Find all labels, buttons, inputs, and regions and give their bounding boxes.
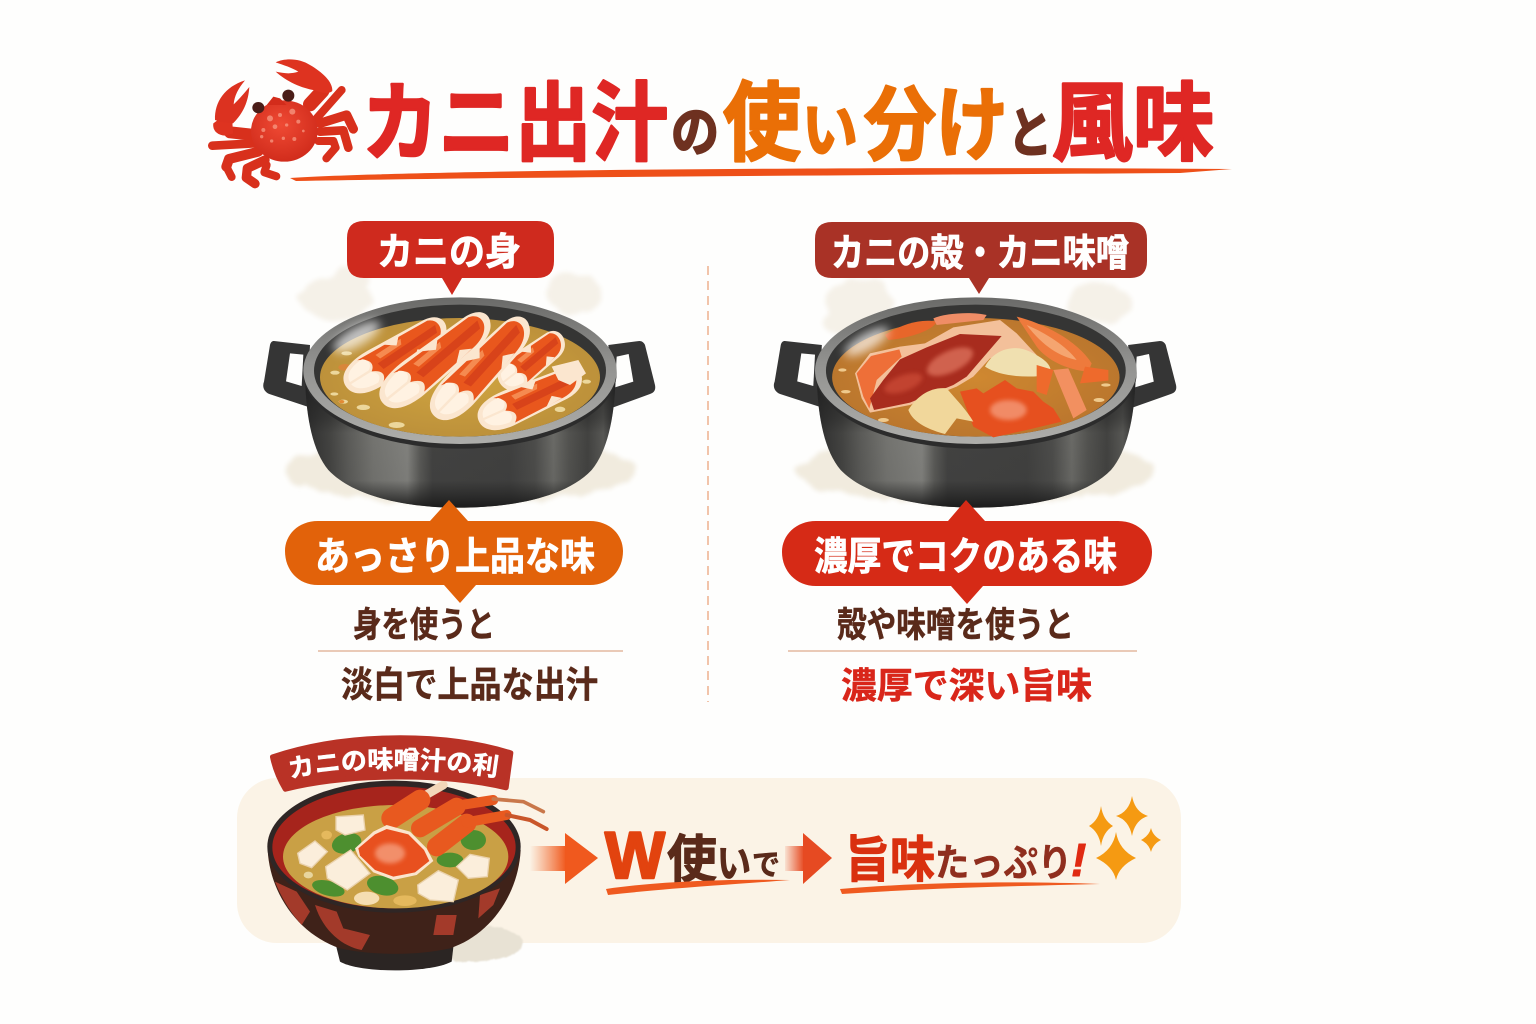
caption: 淡白で上品な出汁: 淡白で上品な出汁: [341, 664, 598, 705]
caption: 殻や味噌を使うと: 殻や味噌を使うと: [837, 606, 1074, 645]
steam: [297, 266, 603, 318]
pot: [263, 297, 655, 508]
bowl shadow: [417, 925, 523, 962]
arrow to umami: [785, 833, 832, 884]
text: W使いで: で: [752, 849, 780, 882]
steam: [822, 278, 1132, 336]
arrow to W use: [530, 833, 598, 884]
caption rule: [318, 650, 623, 652]
tofu cubes: [298, 815, 489, 902]
bowl illustration: [267, 735, 549, 970]
title block: [212, 59, 1232, 184]
taste bubble: light flavour: あっさり上品な味: [315, 536, 595, 579]
text: 旨味たっぷり!: [845, 832, 1086, 888]
crab legs: [336, 304, 589, 437]
taste bubble: light flavour: [285, 500, 623, 603]
bowl foot: [335, 942, 454, 970]
text: 旨味たっぷり!: たっぷり: [935, 843, 1072, 885]
panel: crab shell and miso pot: [774, 222, 1176, 706]
title text: 分け: 分け: [864, 81, 1008, 170]
broth: [320, 318, 600, 437]
divider: [707, 266, 709, 702]
taste bubble: rich flavour: 濃厚でコクのある味: [814, 536, 1117, 579]
icon: red crab: [212, 59, 353, 184]
banner: カニの味噌汁の利: カニの味噌汁の利: [290, 747, 499, 778]
text: 旨味たっぷり!: 旨味: [845, 832, 935, 888]
crab shell pieces: [841, 313, 1108, 437]
caption: 身を使うと: 身を使うと: [353, 606, 495, 645]
pot shadow: [283, 436, 635, 504]
text: W使いで: W: [605, 818, 666, 892]
steam highlight on rim: [329, 315, 384, 358]
vegetables: [310, 830, 486, 900]
title underline brush: [290, 168, 1232, 181]
crab on bowl: [355, 785, 547, 880]
bowl rim: [267, 781, 521, 913]
broth: [832, 318, 1120, 437]
underline: W使いで: [606, 880, 790, 895]
shell and miso label bubble: カニの殻・カニ味噌: [831, 233, 1129, 275]
shell and miso label bubble: [815, 222, 1147, 294]
title text: カニ出汁: カニ出汁: [362, 76, 668, 172]
caption rule: [788, 650, 1137, 652]
banner: カニの味噌汁の利: [270, 735, 514, 792]
pot shadow: [795, 436, 1155, 504]
panel: crab meat pot: [263, 221, 655, 705]
text: W使いで: [605, 818, 780, 892]
icon: sparkles: [1089, 796, 1161, 880]
broth bits: [330, 351, 591, 428]
underline: 旨味たっぷり: [840, 882, 1100, 894]
panel: miso soup example: [237, 735, 1181, 970]
text: W使いで: い: [717, 842, 751, 886]
title text: 使: 使: [723, 76, 801, 172]
pot: [774, 297, 1176, 508]
crab meat label bubble: カニの身: [377, 232, 521, 274]
panel background: [237, 778, 1181, 943]
text: W使いで: 使: [667, 832, 717, 890]
title text: い: い: [802, 97, 858, 166]
title text: と: と: [1008, 104, 1052, 164]
bowl body: [268, 850, 521, 954]
text: 旨味たっぷり!: !: [1071, 834, 1086, 886]
taste bubble: rich flavour: [782, 500, 1152, 604]
caption: 濃厚で深い旨味: 濃厚で深い旨味: [841, 665, 1092, 706]
title text: 風味: 風味: [1052, 76, 1214, 172]
crab meat label bubble: [347, 221, 554, 295]
miso soup: [283, 805, 508, 908]
title text: の: の: [671, 103, 719, 163]
